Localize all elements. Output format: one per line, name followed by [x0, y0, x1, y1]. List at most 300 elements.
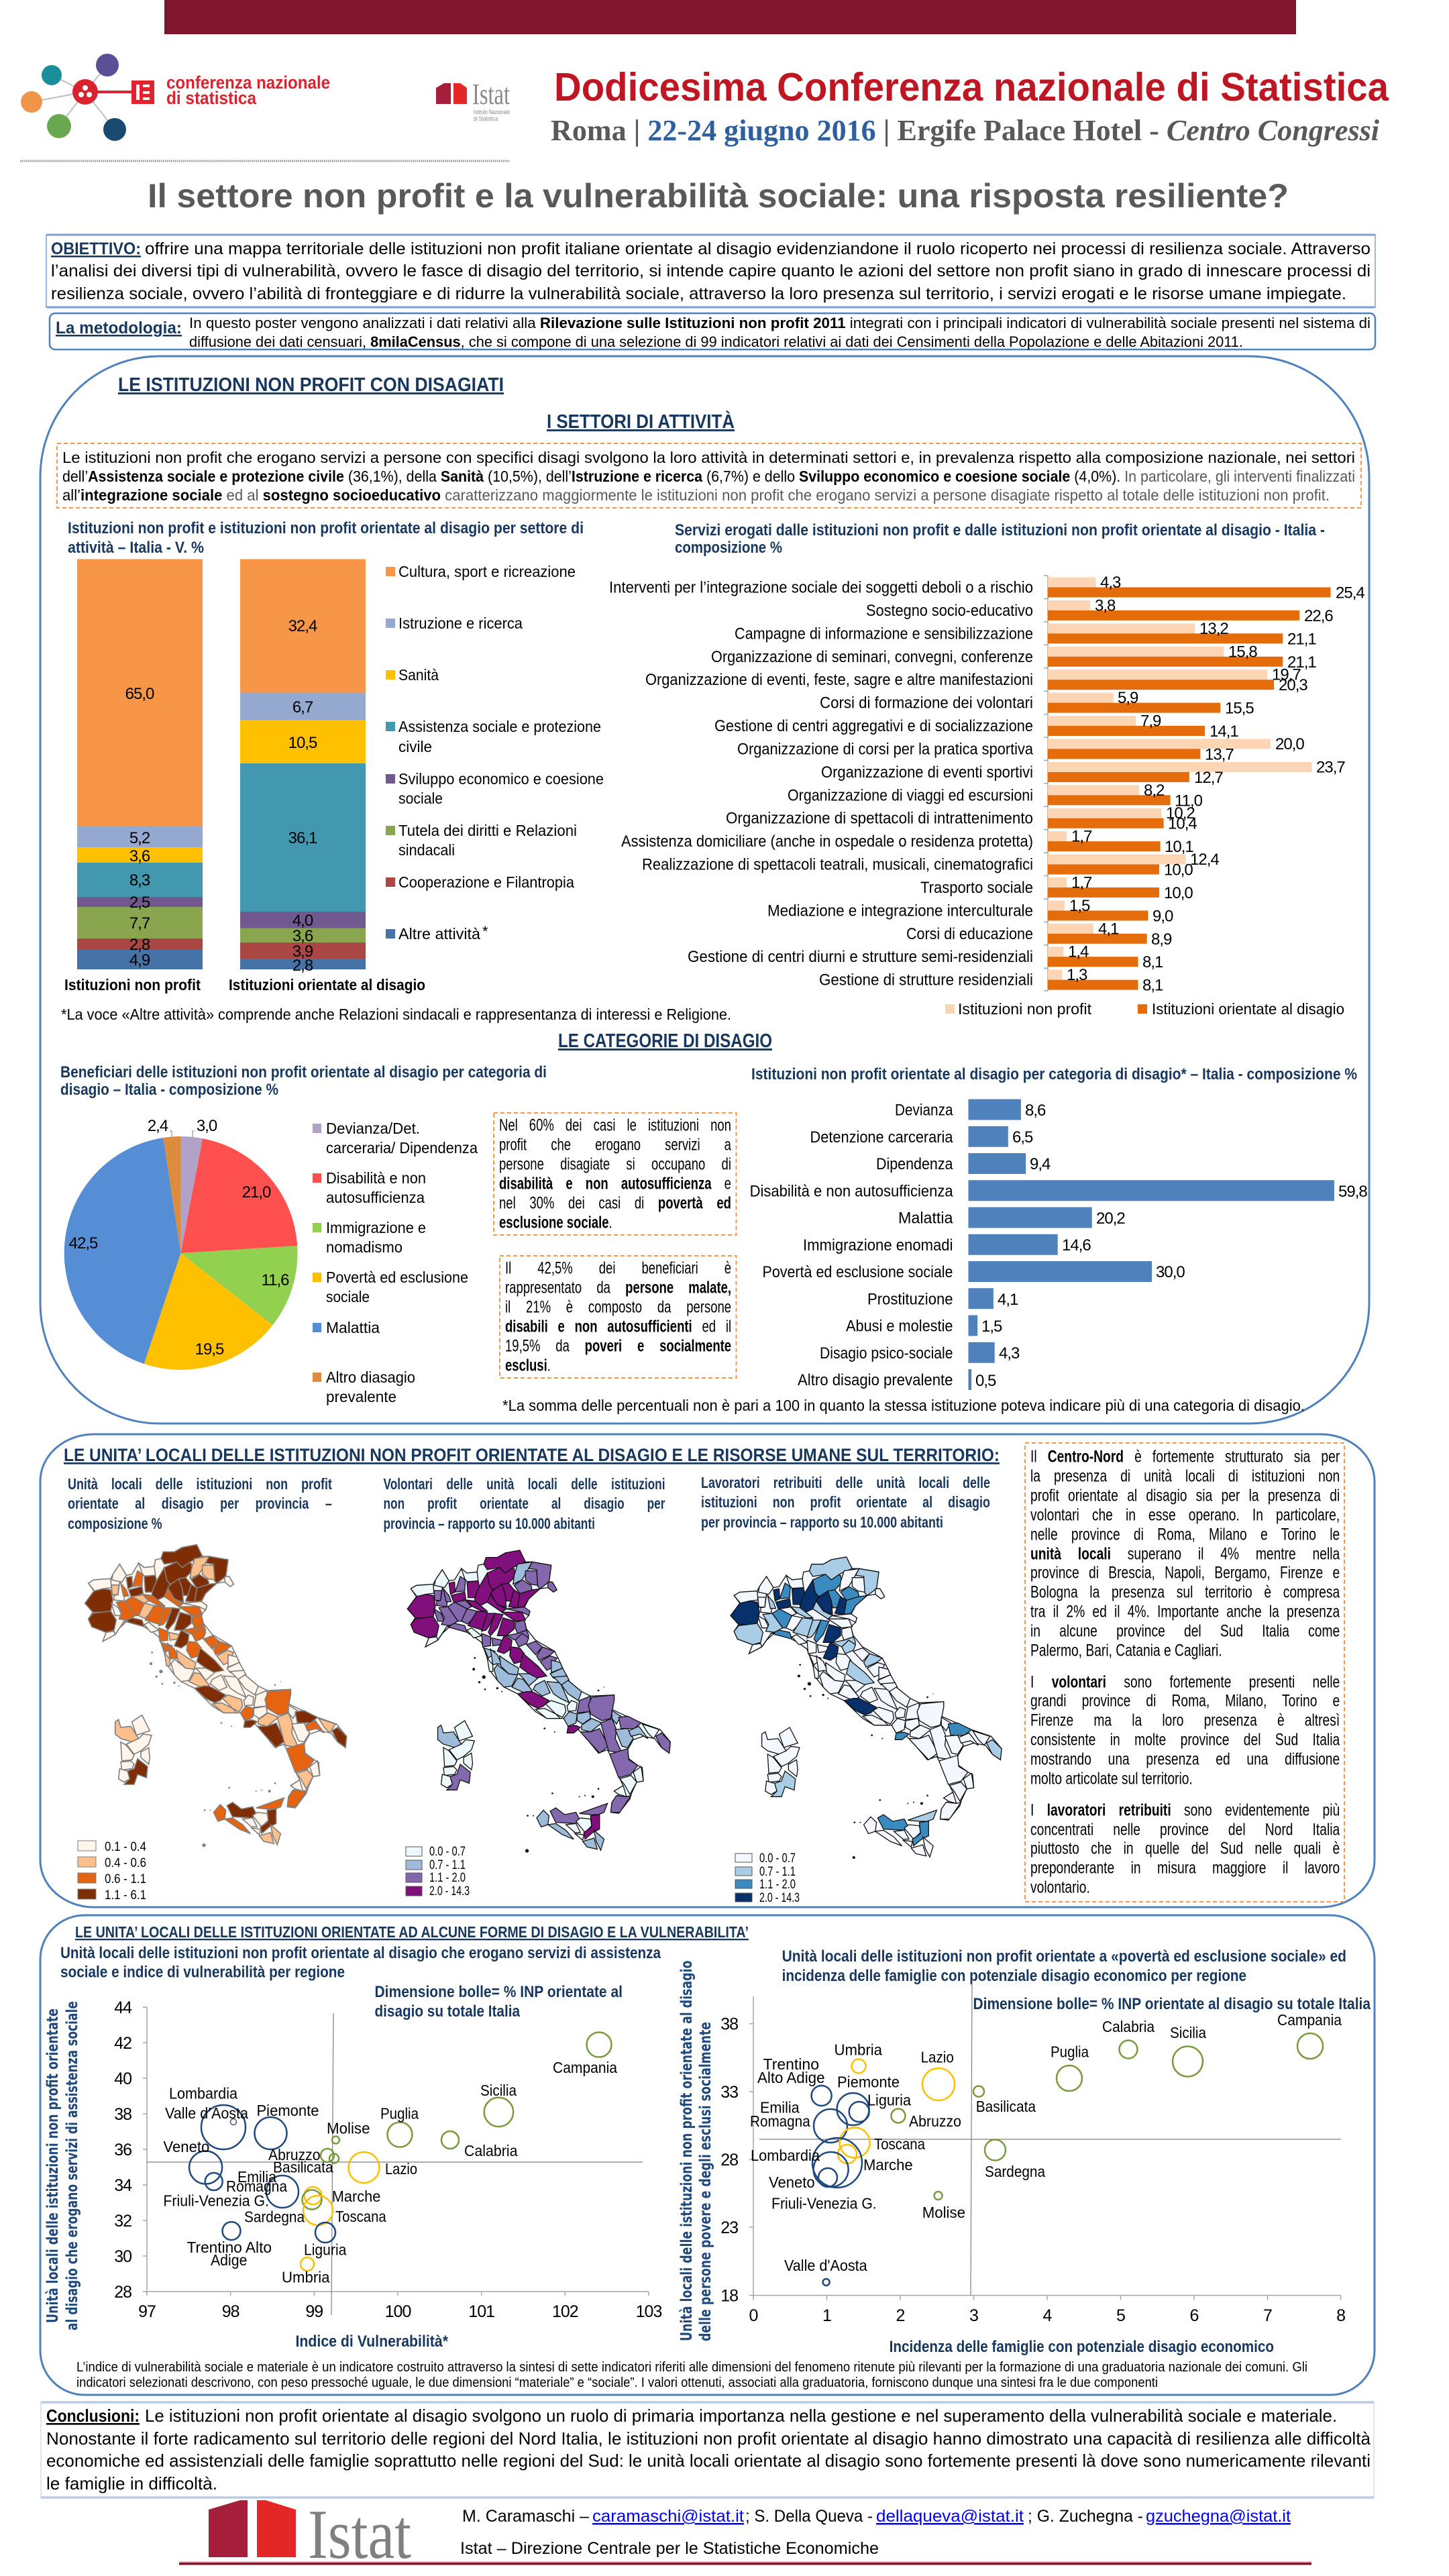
callout: centro-nord text: Palermo, Bari, Catania e Cagliari.	[1030, 1642, 1222, 1660]
stacked bar: istituzioni non profit	[77, 559, 203, 969]
y axis title: vulnerabilità	[44, 2001, 81, 2330]
bubble labels: povertà: Valle d'Aosta	[784, 2257, 867, 2274]
footnote: somma percentuali: *La somma delle percentuali non è pari a 100 in quanto la stessa istituzione poteva indicare più di una categoria di disagio.	[502, 1397, 1305, 1414]
note: dimensione bolle chart 1: Dimensione bolle= % INP orientate al	[374, 1983, 623, 2001]
stacked bar: istituzioni orientate al disagio: 3,9	[292, 943, 313, 961]
category labels: servizi: Organizzazione di eventi, feste, sagre e altre manifestazioni	[645, 671, 1033, 689]
category labels: servizi: Organizzazione di eventi sportivi	[821, 763, 1033, 782]
callout: 60%: disabilità e non autosufficienza e	[499, 1174, 731, 1193]
map: volontari per provincia	[407, 1550, 670, 1853]
bubble labels: povertà: Alto Adige	[757, 2069, 825, 2086]
panel: obiettivo: OBIETTIVO:	[51, 239, 141, 258]
map title 1: orientate al disagio per provincia –	[68, 1495, 332, 1512]
legend: map 2: 0.0 - 0.7	[429, 1845, 466, 1859]
bubble labels: povertà: Sardegna	[985, 2163, 1045, 2180]
category labels: servizi: Mediazione e integrazione interculturale	[767, 902, 1033, 920]
bubble labels: vulnerabilità: Calabria	[464, 2142, 518, 2159]
legend: settori	[386, 563, 604, 943]
tick labels: vulnerabilità: 98	[222, 2302, 239, 2321]
chart title: beneficiari: disagio – Italia - composizione %	[60, 1081, 278, 1099]
panel: conclusioni	[41, 2402, 1374, 2498]
legend: servizi	[945, 1000, 1344, 1018]
chart title: povertà ed esclusione	[782, 1947, 1346, 1985]
bubble labels: povertà: Basilicata	[976, 2098, 1036, 2115]
note: dimensione bolle chart 1: disagio su totale Italia	[374, 2002, 521, 2021]
bubble labels: vulnerabilità: Sicilia	[480, 2082, 517, 2099]
tick labels: vulnerabilità: 36	[114, 2141, 131, 2159]
legend: categorie pie: Devianza/Det.	[326, 1120, 420, 1137]
callout: centro-nord text: molto articolate sul territorio.	[1030, 1770, 1193, 1788]
value labels: servizi: 8,1	[1142, 953, 1163, 971]
category labels: disagio	[750, 1102, 953, 1389]
logo: istat small	[436, 78, 510, 122]
y axis title: povertà	[678, 1960, 714, 2341]
tick labels: vulnerabilità: 44	[114, 1998, 132, 2017]
legend: map 3	[735, 1851, 800, 1905]
value labels: servizi: 21,1	[1287, 630, 1316, 648]
category labels: disagio: Disagio psico-sociale	[820, 1344, 953, 1362]
x axis title: povertà: Incidenza delle famiglie con potenziale disagio economico	[890, 2338, 1274, 2356]
tick labels: vulnerabilità: 102	[552, 2302, 578, 2321]
value labels: disagio	[975, 1102, 1367, 1390]
chart title: settore di attività: Istituzioni non profit e istituzioni non profit orientate al disagio per settore di	[68, 519, 584, 537]
y axis title: vulnerabilità: al disagio che erogano servizi di assistenza sociale	[64, 2001, 81, 2330]
callout: settori text: Le istituzioni non profit che erogano servizi a persone con specifici disagi svolgono la loro attività in determinati settori e, in prevalenza rispetto alla composizione nazionale, nei settori	[62, 449, 1355, 466]
value labels: servizi: 12,7	[1194, 769, 1223, 787]
logo: istat small: di Statistica	[474, 115, 498, 122]
tick labels: povertà: 0	[749, 2306, 758, 2325]
value labels: disagio: 59,8	[1338, 1183, 1367, 1201]
callout: centro-nord text: Firenze ma la loro presenza è altresì	[1030, 1711, 1340, 1730]
panel: unità locali e risorse umane	[40, 1434, 1375, 1907]
chart title: povertà ed esclusione: Unità locali delle istituzioni non profit orientate a «povertà ed esclusione sociale» ed	[782, 1947, 1346, 1966]
authors and contacts: caramaschi@istat.it	[592, 2507, 744, 2526]
map title 3: Lavoratori retribuiti delle unità locali delle	[701, 1474, 990, 1491]
callout: settori text	[57, 443, 1361, 508]
legend: map 1	[78, 1840, 146, 1902]
top banner bar	[164, 0, 1296, 34]
bubble labels: vulnerabilità: Sardegna	[244, 2208, 305, 2226]
map: lavoratori retribuiti per provincia	[731, 1557, 1002, 1859]
tick labels: vulnerabilità: 40	[114, 2070, 131, 2088]
value labels: servizi: 10,0	[1164, 884, 1193, 902]
value labels: servizi: 7,9	[1140, 712, 1161, 730]
bubble labels: povertà	[750, 2011, 1342, 2274]
logo: istat small: Istat	[472, 78, 510, 111]
legend: settori: Istruzione e ricerca	[398, 614, 523, 632]
legend: map 1: 1.1 - 6.1	[105, 1888, 146, 1902]
tick labels: povertà: 3	[969, 2306, 978, 2325]
value labels: servizi: 8,2	[1144, 782, 1165, 800]
category labels: disagio: Detenzione carceraria	[810, 1128, 953, 1146]
legend: settori: Cultura, sport e ricreazione	[398, 563, 576, 580]
category labels: disagio: Povertà ed esclusione sociale	[762, 1263, 953, 1281]
authors and contacts: gzuchegna@istat.it	[1146, 2507, 1291, 2526]
value labels: disagio: 9,4	[1030, 1155, 1051, 1173]
category labels: disagio: Devianza	[895, 1102, 953, 1119]
category labels: servizi: Realizzazione di spettacoli teatrali, musicali, cinematografici	[642, 856, 1033, 873]
callout: centro-nord text: Bologna la presenza sul territorio è compresa	[1030, 1583, 1340, 1602]
legend: settori: civile	[398, 738, 432, 755]
legend: settori: Sviluppo economico e coesione	[398, 770, 604, 788]
footnote: indice di vulnerabilità	[76, 2360, 1307, 2390]
bubble labels: povertà: Liguria	[867, 2092, 911, 2109]
affiliation: Istat – Direzione Centrale per le Statistiche Economiche	[460, 2539, 879, 2558]
callout: centro-nord text: province di Brescia, Napoli, Bergamo, Firenze e	[1030, 1564, 1340, 1582]
pie chart: beneficiari: 11,6	[262, 1271, 289, 1289]
panel: obiettivo: offrire una mappa territoriale delle istituzioni non profit italiane orientate al disagio evidenziandone il ruolo ricoperto nei processi di resilienza sociale. Attraverso	[145, 239, 1371, 258]
bubble labels: povertà: Campania	[1277, 2011, 1342, 2029]
panel: conclusioni: economiche ed assistenziali delle famiglie soprattutto nelle regioni del Sud: le unità locali orientate al disagio sono fortemente presenti là dove sono numericamente rilevanti	[46, 2451, 1371, 2471]
chart title: beneficiari: Beneficiari delle istituzioni non profit orientate al disagio per categoria di	[60, 1063, 547, 1081]
tick labels: vulnerabilità: 32	[114, 2212, 131, 2231]
bubble labels: povertà: Piemonte	[837, 2074, 900, 2091]
callout: centro-nord text: unità locali superano il 4% mentre nella	[1030, 1544, 1340, 1563]
category labels: servizi: Gestione di centri aggregativi e di socializzazione	[714, 717, 1033, 735]
callout: centro-nord text: I volontari sono fortemente presenti nelle	[1030, 1672, 1340, 1691]
callout: centro-nord text: nelle province di Roma, Milano e Torino le	[1030, 1525, 1340, 1544]
category labels: disagio: Dipendenza	[876, 1155, 953, 1173]
bubble labels: vulnerabilità: Veneto	[163, 2138, 209, 2155]
value labels: servizi: 21,1	[1287, 653, 1316, 672]
value labels: servizi: 10,2	[1166, 804, 1195, 822]
legend: map 2	[406, 1845, 470, 1898]
map title 2: Volontari delle unità locali delle istituzioni	[384, 1475, 665, 1493]
tick labels: vulnerabilità: 99	[305, 2302, 323, 2321]
callout: 60%	[494, 1113, 737, 1235]
map title 1: composizione %	[68, 1515, 162, 1532]
category labels: servizi: Campagne di informazione e sensibilizzazione	[735, 625, 1033, 643]
stacked bar: istituzioni non profit: 7,7	[129, 914, 150, 932]
map title 3: istituzioni non profit orientate al disagio	[701, 1493, 990, 1511]
callout: centro-nord text: consistente in molte province del Sud Italia	[1030, 1731, 1340, 1750]
callout: centro-nord text: volontario.	[1030, 1878, 1090, 1897]
note: dimensione bolle chart 2: Dimensione bolle= % INP orientate al disagio su totale Italia	[973, 1995, 1371, 2013]
tick labels: povertà: 8	[1336, 2306, 1345, 2325]
category labels: servizi: Organizzazione di viaggi ed escursioni	[788, 786, 1033, 804]
logo: istat small: Istituto Nazionale	[474, 109, 510, 115]
stacked bar: istituzioni orientate al disagio: 4,0	[292, 912, 313, 930]
legend: settori: sociale	[398, 790, 443, 807]
value labels: servizi: 22,6	[1304, 607, 1333, 625]
panel: unità locali e vulnerabilità	[40, 1915, 1375, 2395]
tick labels: povertà: 4	[1043, 2306, 1053, 2325]
tick labels: vulnerabilità: 100	[385, 2302, 411, 2321]
stacked bar: istituzioni non profit: 2,5	[129, 894, 150, 912]
tick labels: povertà: 28	[720, 2151, 738, 2169]
legend: settori: Assistenza sociale e protezione	[398, 718, 601, 735]
tick labels: povertà: 38	[720, 2015, 738, 2034]
authors and contacts: ; G. Zuchegna -	[1028, 2507, 1143, 2526]
value labels: servizi: 13,7	[1205, 745, 1234, 763]
panel heading: LE ISTITUZIONI NON PROFIT CON DISAGIATI	[118, 374, 504, 396]
bubble labels: povertà: Emilia	[760, 2099, 800, 2116]
bubble labels: povertà: Sicilia	[1170, 2024, 1206, 2041]
bubble labels: vulnerabilità: Lombardia	[169, 2085, 237, 2102]
bubble labels: povertà: Puglia	[1051, 2043, 1089, 2061]
callout: 42,5%: Il 42,5% dei beneficiari è	[505, 1258, 731, 1277]
stacked bar: istituzioni orientate al disagio: 36,1	[288, 829, 317, 847]
value labels: servizi: 1,4	[1068, 943, 1089, 961]
section heading: settori: I SETTORI DI ATTIVITÀ	[547, 410, 735, 433]
panel: le istituzioni non profit con disagiati	[40, 356, 1369, 1424]
legend: map 1: 0.4 - 0.6	[105, 1856, 146, 1870]
bubble labels: vulnerabilità: Umbria	[282, 2268, 330, 2286]
legend: categorie pie: nomadismo	[326, 1238, 402, 1256]
category labels: disagio: Disabilità e non autosufficienza	[750, 1182, 953, 1200]
value labels: disagio: 6,5	[1012, 1128, 1033, 1146]
bubble labels: povertà: Veneto	[769, 2174, 815, 2191]
bubbles: povertà	[812, 2033, 1323, 2286]
category labels: servizi: Trasporto sociale	[920, 879, 1033, 897]
category labels: disagio: Immigrazione enomadi	[803, 1236, 953, 1254]
value labels: servizi: 1,3	[1067, 966, 1087, 984]
callout: 60%: nel 30% dei casi di povertà ed	[499, 1194, 731, 1213]
logo: istat footer	[209, 2495, 411, 2573]
bubble labels: vulnerabilità: Molise	[327, 2120, 370, 2137]
value labels: servizi: 12,4	[1190, 851, 1219, 869]
stacked bar axis labels: Istituzioni non profit	[64, 976, 201, 994]
x axis title: vulnerabilità: Indice di Vulnerabilità*	[295, 2332, 449, 2351]
legend: settori: sindacali	[398, 841, 455, 859]
bubble labels: vulnerabilità: Adige	[211, 2251, 247, 2269]
map title 3	[701, 1473, 990, 1535]
bubble labels: povertà: Umbria	[835, 2041, 882, 2058]
tick labels: povertà: 5	[1116, 2306, 1125, 2325]
bubble labels: vulnerabilità: Marche	[332, 2188, 380, 2205]
legend: categorie pie: sociale	[326, 1288, 370, 1305]
stacked bar: istituzioni non profit: 65,0	[125, 685, 154, 703]
callout: 42,5%: esclusi.	[505, 1356, 551, 1375]
value labels: servizi: 11,0	[1175, 792, 1203, 810]
tick labels: povertà	[720, 2015, 1345, 2325]
stacked bar: istituzioni orientate al disagio: 2,8	[292, 957, 313, 975]
authors and contacts: ; S. Della Queva -	[745, 2507, 873, 2526]
stacked bar: istituzioni non profit: 5,2	[129, 829, 150, 847]
bubble labels: vulnerabilità: Trentino Alto	[186, 2239, 272, 2256]
authors and contacts: dellaqueva@istat.it	[876, 2507, 1024, 2526]
chart title: assistenza sociale e vulnerabilità	[60, 1944, 661, 1982]
callout: 60%: profit che erogano servizi a	[499, 1135, 731, 1154]
value labels: servizi: 9,0	[1152, 907, 1173, 925]
category labels: servizi: Interventi per l’integrazione sociale dei soggetti deboli o a rischio	[609, 578, 1033, 597]
value labels: disagio: 0,5	[975, 1372, 996, 1390]
stacked bar: istituzioni orientate al disagio: 10,5	[288, 734, 317, 752]
tick labels: povertà: 18	[720, 2287, 738, 2306]
callout: centro-nord text: I lavoratori retribuiti sono evidentemente più	[1030, 1801, 1340, 1819]
bubbles: vulnerabilità	[189, 2033, 612, 2271]
pie chart: beneficiari: 3,0	[197, 1117, 217, 1135]
legend: categorie pie: carceraria/ Dipendenza	[326, 1139, 478, 1157]
map title 2	[384, 1474, 665, 1536]
tick labels: vulnerabilità: 38	[114, 2105, 131, 2124]
stacked bar: istituzioni non profit: 2,8	[129, 936, 150, 954]
chart title: povertà ed esclusione: incidenza delle famiglie con potenziale disagio economico per regione	[782, 1967, 1246, 1985]
bubble labels: vulnerabilità: Valle d’Aosta	[165, 2104, 248, 2122]
value labels: disagio: 30,0	[1156, 1263, 1185, 1281]
bubble labels: vulnerabilità: Liguria	[304, 2241, 347, 2259]
tick labels: povertà: 23	[720, 2218, 738, 2237]
legend: map 1: 0.1 - 0.4	[105, 1840, 146, 1854]
value labels: servizi: 23,7	[1316, 758, 1345, 776]
legend: settori: Tutela dei diritti e Relazioni	[398, 822, 577, 839]
value labels: servizi: 8,1	[1142, 977, 1163, 995]
value labels: servizi: 3,8	[1095, 596, 1116, 614]
panel: obiettivo: l’analisi dei diversi tipi di vulnerabilità, ovvero le fasce di disagio del territorio, si intende capire quanto le azioni del settore non profit siano in grado di innescare processi di	[51, 262, 1371, 280]
legend: servizi: Istituzioni orientate al disagio	[1152, 1000, 1344, 1018]
tick labels: vulnerabilità: 30	[114, 2247, 131, 2266]
category labels: disagio: Abusi e molestie	[846, 1318, 953, 1335]
bubble labels: povertà: Abruzzo	[909, 2112, 961, 2130]
bubble labels: vulnerabilità: Friuli-Venezia G.	[163, 2192, 269, 2210]
value labels: servizi: 15,8	[1228, 643, 1257, 661]
value labels: servizi: 1,7	[1071, 873, 1092, 892]
bubble labels: vulnerabilità: Toscana	[335, 2208, 386, 2225]
callout: 42,5%: rappresentato da persone malate,	[505, 1279, 731, 1297]
panel heading: LE UNITA’ LOCALI DELLE ISTITUZIONI NON PROFIT ORIENTATE AL DISAGIO E LE RISORSE UMANE SUL TERRITORIO:	[64, 1445, 1000, 1465]
bubble labels: povertà: Lombardia	[751, 2147, 820, 2164]
value labels: servizi: 4,3	[1100, 574, 1121, 592]
callout: centro-nord text: piuttosto che in quelle del Sud nelle quali è	[1030, 1839, 1340, 1858]
stacked bar: istituzioni orientate al disagio: 32,4	[288, 617, 317, 635]
legend: categorie pie: Altro diasagio	[326, 1368, 415, 1386]
bubble labels: vulnerabilità: Emilia	[237, 2168, 276, 2186]
callout: 60%: esclusione sociale.	[499, 1213, 612, 1232]
callout: 42,5%: il 21% è composto da persone	[505, 1297, 731, 1316]
legend: map 1: 0.6 - 1.1	[105, 1872, 146, 1886]
category labels: servizi: Corsi di educazione	[906, 925, 1033, 943]
legend: map 3: 0.0 - 0.7	[759, 1851, 796, 1866]
value labels: servizi: 20,0	[1275, 735, 1304, 753]
chart title: assistenza sociale e vulnerabilità: Unità locali delle istituzioni non profit orientate al disagio che erogano servizi di assistenza	[60, 1944, 661, 1962]
category labels: servizi: Gestione di strutture residenziali	[819, 971, 1033, 989]
panel: obiettivo	[46, 235, 1375, 307]
category labels: servizi: Organizzazione di corsi per la pratica sportiva	[737, 740, 1034, 758]
bubble labels: vulnerabilità: Abruzzo	[268, 2146, 321, 2163]
panel: conclusioni: Nonostante il forte radicamento sul territorio delle regioni del Nord Italia, le istituzioni non profit orientate al disagio hanno dimostrato una capacità di resilienza alle difficoltà	[46, 2428, 1371, 2449]
callout: centro-nord text: concentrati nelle province del Nord Italia	[1030, 1820, 1340, 1839]
bubble labels: povertà: Calabria	[1102, 2018, 1155, 2035]
panel: metodologia: diffusione dei dati censuari, 8milaCensus, che si compone di una selezione di 99 indicatori relativi ai dati dei Censimenti della Popolazione e delle Abitazioni 2011.	[189, 333, 1243, 350]
value labels: servizi: 8,9	[1151, 930, 1172, 949]
chart title: servizi erogati: Servizi erogati dalle istituzioni non profit e dalle istituzioni non profit orientate al disagio - Italia -	[675, 521, 1325, 539]
map title 2: non profit orientate al disagio per	[384, 1495, 665, 1512]
tick labels: povertà: 2	[896, 2306, 905, 2325]
stacked bar axis labels: Istituzioni orientate al disagio	[229, 976, 425, 994]
bubble chart: vulnerabilità	[114, 1998, 661, 2321]
map title 3: per provincia – rapporto su 10.000 abitanti	[701, 1513, 943, 1531]
stacked bar: istituzioni non profit: 3,6	[129, 847, 150, 865]
authors and contacts	[462, 2507, 1291, 2526]
bubble labels: povertà: Molise	[922, 2204, 965, 2221]
callout: centro-nord text: preponderante in misura maggiore il lavoro	[1030, 1859, 1340, 1878]
conference subtitle: Roma | 22-24 giugno 2016 | Ergife Palace Hotel - Centro Congressi	[551, 114, 1380, 147]
legend: map 3: 0.7 - 1.1	[759, 1865, 796, 1879]
value labels: servizi	[1067, 574, 1364, 995]
footnote: indice di vulnerabilità: indicatori selezionati descrivono, con peso pressoché uguale, le due dimensioni “materiale” e “sociale”. I valori ottenuti, associati alla graduatoria, forniscono dunque una sintesi fra le due componenti	[76, 2375, 1158, 2390]
legend: map 2: 0.7 - 1.1	[429, 1858, 466, 1872]
callout: centro-nord text: tra il 2% ed il 4%. Importante anche la presenza	[1030, 1603, 1340, 1621]
bubble labels: povertà: Lazio	[921, 2049, 954, 2066]
category labels: servizi: Organizzazione di seminari, convegni, conferenze	[711, 648, 1033, 666]
legend: map 2: 1.1 - 2.0	[429, 1871, 466, 1885]
category labels: disagio: Prostituzione	[867, 1290, 953, 1308]
callout: 42,5%: disabili e non autosufficienti ed il	[505, 1318, 731, 1336]
category labels: servizi: Assistenza domiciliare (anche in ospedale o residenza protetta)	[621, 833, 1033, 851]
chart title: settore di attività: attività – Italia - V. %	[68, 539, 204, 557]
pie chart: beneficiari: 2,4	[148, 1117, 168, 1135]
stacked bar: istituzioni orientate al disagio	[240, 559, 366, 975]
category labels: servizi: Gestione di centri diurni e strutture semi-residenziali	[688, 948, 1033, 966]
legend: settori: *	[482, 923, 488, 940]
value labels: servizi: 10,4	[1168, 815, 1197, 833]
legend: servizi: Istituzioni non profit	[958, 1000, 1092, 1018]
value labels: servizi: 1,7	[1071, 828, 1092, 846]
callout: 60%: persone disagiate si occupano di	[499, 1155, 731, 1174]
bubble labels: vulnerabilità: Lazio	[385, 2160, 417, 2178]
tick labels: povertà: 1	[822, 2306, 831, 2325]
legend: categorie pie: prevalente	[326, 1388, 396, 1405]
stacked bar: istituzioni non profit: 8,3	[129, 871, 150, 890]
chart title: settore di attività	[68, 519, 584, 557]
callout: centro-nord text	[1025, 1443, 1344, 1902]
callout: centro-nord text: mostrando una presenza ed una diffusione	[1030, 1750, 1340, 1769]
authors and contacts: M. Caramaschi –	[462, 2507, 589, 2526]
value labels: disagio: 1,5	[981, 1318, 1002, 1336]
bar chart: categoria di disagio	[750, 1099, 1367, 1390]
conference title: Dodicesima Conferenza nazionale di Statistica	[554, 65, 1389, 109]
stacked bar: istituzioni non profit: 4,9	[129, 951, 150, 969]
bubble chart: povertà	[720, 1983, 1345, 2325]
legend: map 2: 2.0 - 14.3	[429, 1884, 470, 1898]
value labels: servizi: 20,3	[1279, 676, 1307, 694]
bubble labels: vulnerabilità: Campania	[553, 2059, 617, 2076]
map: unità locali per provincia	[85, 1545, 347, 1847]
legend: settori: Altre attività	[398, 925, 480, 943]
category labels: servizi: Sostegno socio-educativo	[866, 602, 1033, 620]
bubble labels: vulnerabilità: Basilicata	[273, 2159, 333, 2176]
chart title: servizi erogati: composizione %	[675, 539, 782, 557]
value labels: servizi: 1,5	[1069, 897, 1090, 915]
category labels: servizi: Corsi di formazione dei volontari	[820, 694, 1033, 712]
stacked bar: istituzioni orientate al disagio: 3,6	[292, 927, 313, 945]
chart title: servizi erogati	[675, 521, 1325, 557]
chart title: assistenza sociale e vulnerabilità: sociale e indice di vulnerabilità per regione	[60, 1963, 345, 1982]
logo: conferenza nazionale di statistica: conferenza nazionale	[166, 72, 330, 93]
logo: conferenza nazionale di statistica	[21, 54, 330, 141]
value labels: servizi: 10,0	[1164, 861, 1193, 879]
section heading: categorie di disagio: LE CATEGORIE DI DISAGIO	[558, 1030, 772, 1052]
legend: map 3: 2.0 - 14.3	[759, 1891, 800, 1905]
callout: centro-nord text: volontari che in esse operano. In particolare,	[1030, 1505, 1340, 1524]
callout: centro-nord text: in alcune province del Sud Italia come	[1030, 1622, 1340, 1641]
bubble labels: povertà: Toscana	[874, 2135, 925, 2153]
panel: obiettivo: resilienza sociale, ovvero l’abilità di fronteggiare e di ridurre la vulnerabilità sociale, attraverso la loro presenza sul territorio, i servizi erogati e le risorse umane impiegate.	[51, 284, 1346, 303]
category labels: disagio: Malattia	[898, 1209, 953, 1228]
callout: centro-nord text: Il Centro-Nord è fortemente strutturato sia per	[1030, 1448, 1340, 1466]
panel: metodologia	[50, 313, 1375, 350]
callout: 60%: Nel 60% dei casi le istituzioni non	[499, 1116, 731, 1135]
stacked bar axis labels	[64, 976, 425, 994]
value labels: servizi: 25,4	[1336, 584, 1364, 602]
value labels: servizi: 19,7	[1272, 666, 1301, 684]
legend: categorie pie	[313, 1120, 478, 1405]
value labels: disagio: 8,6	[1025, 1102, 1046, 1120]
pie chart: beneficiari: 42,5	[69, 1234, 98, 1252]
map title 1: Unità locali delle istituzioni non profit	[68, 1475, 332, 1493]
bubble labels: povertà: Friuli-Venezia G.	[771, 2195, 877, 2212]
value labels: servizi: 10,1	[1165, 838, 1193, 856]
